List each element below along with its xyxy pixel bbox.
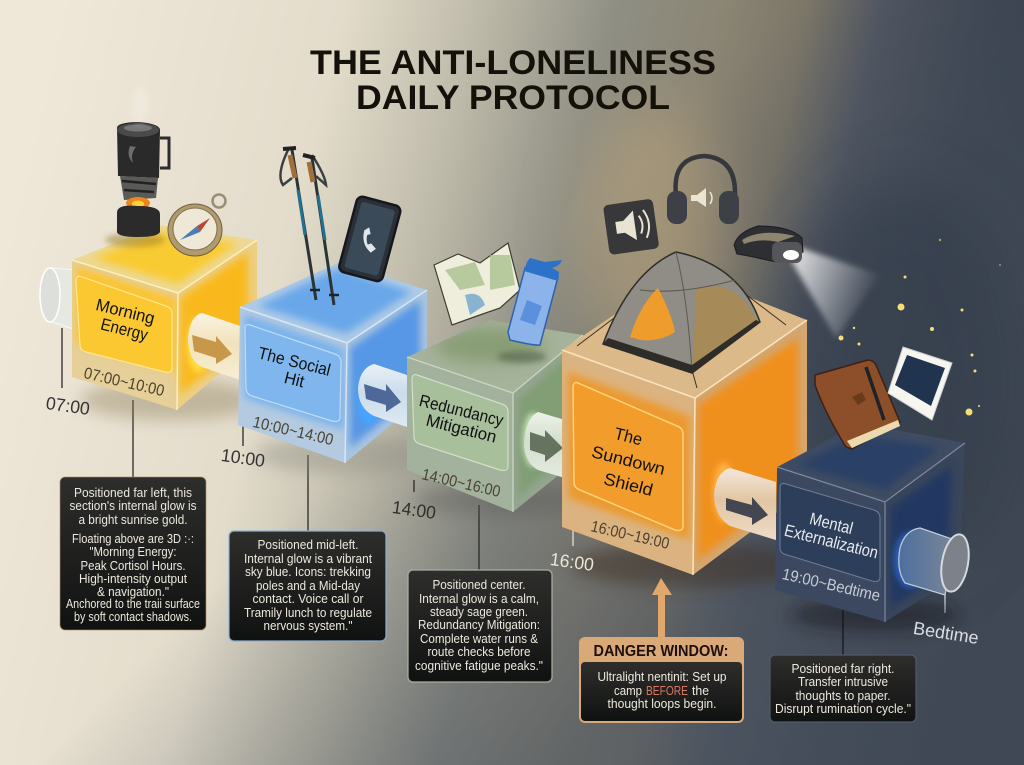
card: morning energy notes: section's internal glow is (70, 499, 196, 513)
label panel: the sundown shield (573, 383, 683, 530)
card: morning energy notes: Anchored to the traii surface (66, 597, 200, 611)
cube: the sundown shield (562, 270, 810, 587)
icon: journal and pen (815, 360, 900, 449)
tube with arrow: orange to navy (713, 462, 776, 540)
time range: redundancy mitigation: 14:00~16:00 (420, 466, 502, 501)
icon: tent (577, 252, 786, 388)
label panel: redundancy mitigation: Mitigation (424, 411, 499, 447)
card: social hit notes: sky blue. Icons: trekking (245, 565, 371, 579)
card: social hit notes: Tramily lunch to regulate (244, 606, 372, 620)
callout: danger window: thought loops begin. (608, 697, 716, 711)
callout: danger window: DANGER WINDOW: (594, 643, 728, 660)
label panel: the sundown shield: Shield (602, 469, 655, 500)
icon: headphones (667, 156, 739, 224)
stars (838, 239, 1001, 416)
time labels (45, 393, 980, 648)
label panel: morning energy (76, 276, 172, 372)
card: social hit notes (229, 531, 386, 641)
label panel: morning energy: Morning (94, 295, 157, 328)
label panel: the social hit (245, 325, 341, 422)
callout: danger window: Ultralight nentinit: Set up (598, 670, 727, 684)
card: social hit notes: poles and a Mid-day (256, 579, 361, 593)
card: redundancy notes: Internal glow is a calm, (419, 592, 539, 606)
time labels: 16:00 (549, 549, 595, 575)
icon: camp stove mug (105, 85, 169, 247)
card: redundancy notes: Positioned center. (432, 578, 526, 592)
cube: redundancy mitigation (407, 320, 585, 516)
card: social hit notes: contact. Voice call or (252, 592, 364, 606)
card: redundancy notes: route checks before (428, 645, 531, 659)
icon: trekking poles (280, 148, 339, 305)
cube: the social hit (238, 262, 435, 473)
card: morning energy notes: Positioned far left, this (74, 486, 192, 500)
card: mental externalization notes (770, 655, 916, 722)
card: morning energy notes: by soft contact shadows. (74, 610, 192, 624)
label panel: the social hit: Hit (282, 368, 307, 391)
card: morning energy notes: & navigation." (97, 585, 169, 599)
card: mental externalization notes: Transfer intrusive (798, 675, 888, 689)
time labels: 10:00 (220, 445, 266, 471)
timeline ticks and connector lines (62, 328, 945, 655)
card: morning energy notes: Floating above are 3D :·: (72, 532, 194, 546)
title: DAILY PROTOCOL (356, 79, 670, 117)
time labels: Bedtime (912, 618, 980, 648)
time range: morning energy: 07:00~10:00 (82, 365, 166, 400)
card: social hit notes: Internal glow is a vibrant (244, 552, 372, 566)
callout: danger window: camp (614, 684, 642, 698)
label panel: redundancy mitigation: Redundancy (417, 391, 506, 430)
tube with arrow: gold to blue (187, 313, 240, 380)
label panel: the sundown shield: Sundown (590, 442, 667, 479)
card: morning energy notes: Peak Cortisol Hours. (80, 559, 186, 573)
label panel: redundancy mitigation (412, 375, 508, 470)
label panel: the sundown shield: The (612, 424, 644, 449)
card: mental externalization notes: Disrupt rumination cycle." (775, 702, 911, 716)
title: THE ANTI-LONELINESS (310, 44, 716, 82)
cube: morning energy (72, 225, 260, 420)
callout: danger window: the (692, 684, 709, 698)
icon: map (434, 243, 520, 325)
icon: photo print (888, 347, 952, 420)
cube: mental externalization (775, 423, 965, 631)
card: social hit notes: nervous system." (264, 619, 352, 633)
label panel: mental externalization: Externalization (782, 521, 880, 562)
card: mental externalization notes: Positioned far right. (792, 662, 894, 676)
label panel: mental externalization (780, 484, 880, 582)
card: morning energy notes (60, 477, 206, 630)
icon: phone (338, 195, 402, 282)
label panel: morning energy: Energy (99, 315, 150, 345)
time range: mental externalization: 19:00~Bedtime (780, 566, 882, 605)
end tube bedtime (894, 528, 973, 595)
card: redundancy notes: cognitive fatigue peaks." (415, 659, 543, 673)
callout: danger window (579, 637, 744, 723)
card: redundancy notes (408, 570, 552, 682)
start tube 07:00 (40, 268, 76, 330)
time labels: 07:00 (45, 393, 91, 419)
card: redundancy notes: Redundancy Mitigation: (418, 618, 540, 632)
time range: the social hit: 10:00~14:00 (251, 414, 335, 449)
card: morning energy notes: "Morning Energy: (90, 545, 176, 559)
tube with arrow: green to orange (523, 412, 565, 478)
card: redundancy notes: steady sage green. (430, 605, 528, 619)
icon: compass (168, 194, 226, 256)
card: morning energy notes: High-intensity output (79, 572, 187, 586)
card: redundancy notes: Complete water runs & (420, 632, 539, 646)
card: morning energy notes: a bright sunrise gold. (78, 513, 188, 527)
tube with arrow: blue to green (358, 364, 410, 428)
callout: danger window: BEFORE (646, 684, 688, 698)
icon: headlamp with beam (734, 226, 880, 338)
arrow: danger window to sundown shield (652, 578, 672, 640)
icon: water filter bottle (497, 258, 562, 363)
card: mental externalization notes: thoughts to paper. (796, 689, 890, 703)
title (310, 44, 716, 117)
icon: speaker tile (603, 199, 659, 255)
label panel: mental externalization: Mental (808, 509, 855, 538)
time range: the sundown shield: 16:00~19:00 (589, 518, 671, 553)
card: social hit notes: Positioned mid-left. (258, 538, 358, 552)
label panel: the social hit: The Social (256, 343, 333, 380)
time labels: 14:00 (391, 497, 437, 523)
